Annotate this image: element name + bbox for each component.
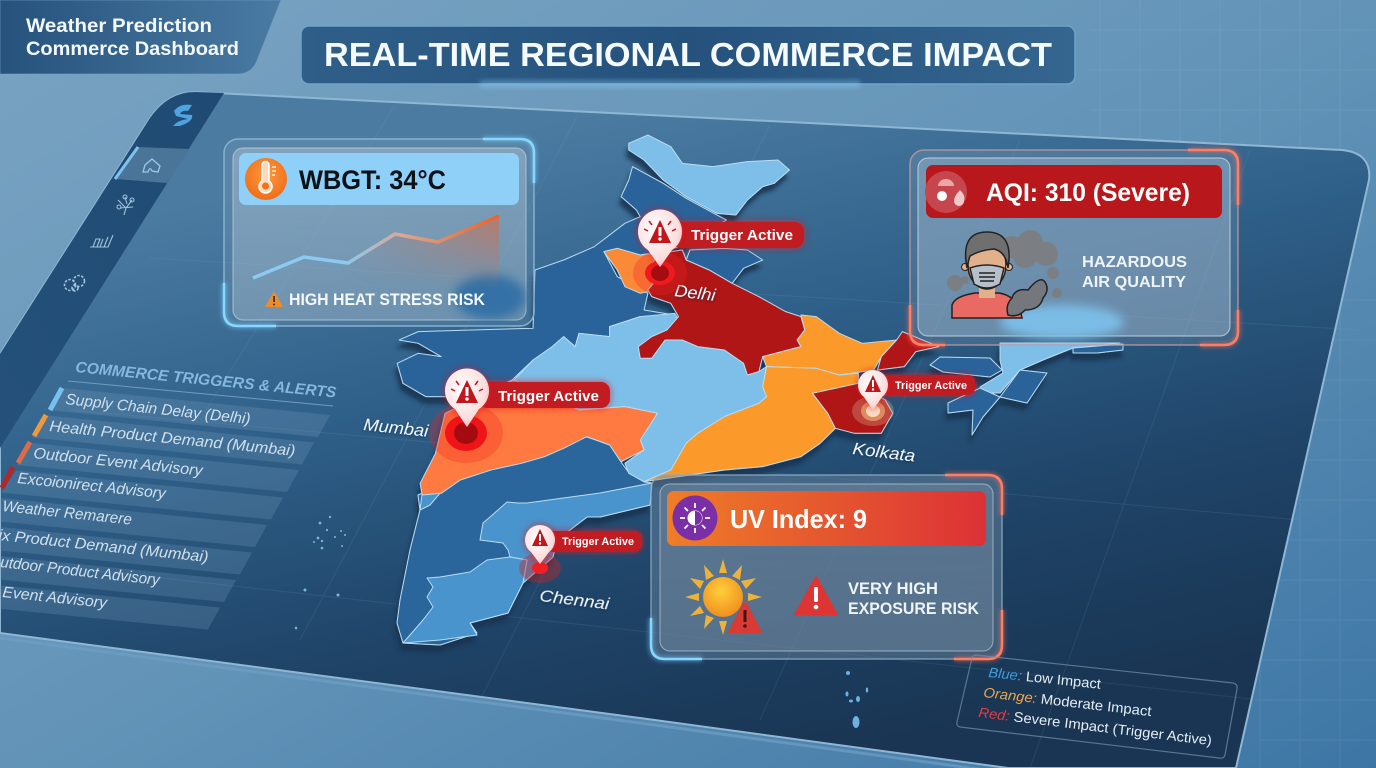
UV message: VERY HIGH xyxy=(848,579,938,598)
title xyxy=(301,26,1075,88)
state: Maharashtra xyxy=(420,380,657,495)
north-eastern states xyxy=(930,343,1123,435)
map city labels: Kolkata xyxy=(852,439,916,466)
Lakshadweep islands xyxy=(295,516,346,629)
map city labels xyxy=(363,281,916,614)
marker: Chennai trigger xyxy=(519,525,642,583)
title: REAL-TIME REGIONAL COMMERCE IMPACT xyxy=(324,36,1052,73)
sidebar icon: gear xyxy=(64,276,84,291)
map city labels: Chennai xyxy=(539,586,612,614)
marker: Mumbai trigger xyxy=(429,369,610,463)
legend: orange: Orange: Moderate Impact xyxy=(983,684,1153,719)
sidebar xyxy=(0,92,224,448)
commerce triggers and alerts list xyxy=(0,359,338,630)
WBGT trend chart xyxy=(253,216,499,292)
WBGT header xyxy=(239,153,519,205)
marker: Kolkata trigger xyxy=(852,370,975,426)
legend xyxy=(957,655,1237,758)
marker: Chennai trigger: Trigger Active xyxy=(562,536,634,548)
AQI message: AIR QUALITY xyxy=(1082,274,1186,291)
alert rows text: Outdoor Event Advisory xyxy=(33,445,205,480)
UV message xyxy=(848,579,980,618)
card: UV index xyxy=(651,475,1002,659)
peninsula base xyxy=(397,437,652,645)
state: Tamil Nadu xyxy=(403,557,527,643)
alert rows text: Health Product Demand (Mumbai) xyxy=(49,418,296,460)
AQI header xyxy=(926,165,1222,218)
UV header: UV Index: 9 xyxy=(730,504,867,534)
north-west states xyxy=(397,167,726,397)
state: Goa strip xyxy=(420,492,441,510)
WBGT header: WBGT: 34°C xyxy=(299,165,446,195)
sidebar logo xyxy=(173,105,192,126)
alert rows text: Excoionirect Advisory xyxy=(17,470,168,503)
header tab text: Weather Prediction xyxy=(26,16,212,37)
Kashmir and Ladakh xyxy=(629,135,789,215)
sidebar icon: network xyxy=(117,195,134,215)
state: Sikkim and north Bengal xyxy=(878,332,939,370)
state: Bihar xyxy=(763,315,897,375)
alert rows text: ix Product Demand (Mumbai) xyxy=(0,527,209,566)
icon: person with mask in smog xyxy=(947,230,1062,318)
sidebar home tab xyxy=(115,147,190,183)
state: Madhya Pradesh and central xyxy=(514,313,767,482)
UV message: EXPOSURE RISK xyxy=(848,599,980,618)
header tab text: Commerce Dashboard xyxy=(26,39,239,60)
marker: Delhi trigger: Trigger Active xyxy=(691,227,793,244)
card: AQI xyxy=(910,150,1238,345)
marker: Kolkata trigger: Trigger Active xyxy=(895,380,967,392)
state: Uttar Pradesh xyxy=(638,250,805,375)
icon: thermometer xyxy=(245,158,287,200)
map city labels: Mumbai xyxy=(363,415,431,441)
AQI message xyxy=(1082,254,1187,291)
map city labels: Delhi xyxy=(674,281,718,305)
UV header xyxy=(667,491,986,546)
WBGT warning: HIGH HEAT STRESS RISK xyxy=(289,290,486,309)
marker: Delhi trigger xyxy=(633,210,804,295)
map of India xyxy=(295,135,1123,728)
card: WBGT xyxy=(224,139,534,326)
AQI message: HAZARDOUS xyxy=(1082,254,1187,271)
alert colour markers xyxy=(2,388,62,488)
legend: red: Red: Severe Impact (Trigger Active) xyxy=(978,704,1213,748)
icon: sun with warning xyxy=(685,559,762,635)
marker: Mumbai trigger: Trigger Active xyxy=(498,388,599,405)
header tab xyxy=(0,0,281,74)
alert rows text: Supply Chain Delay (Delhi) xyxy=(65,391,251,428)
state: West Bengal xyxy=(812,383,893,433)
alert rows text: Event Advisory xyxy=(2,584,109,612)
alert rows text: Weather Remarere xyxy=(2,498,133,529)
state: Haryana xyxy=(604,248,659,293)
sidebar icon: chart xyxy=(90,235,113,247)
east of Delhi dark state xyxy=(686,248,763,283)
icon: gas mask xyxy=(925,171,967,213)
alert rows text: utdoor Product Advisory xyxy=(0,554,162,589)
Andaman islands xyxy=(846,671,868,728)
state: Jharkhand and Odisha xyxy=(644,367,858,482)
icon: UV badge xyxy=(672,496,718,540)
header tab text xyxy=(26,16,239,60)
state: Andhra coast xyxy=(480,483,652,583)
icon: warning triangle xyxy=(796,578,836,614)
AQI header: AQI: 310 (Severe) xyxy=(986,179,1190,207)
alerts heading: COMMERCE TRIGGERS & ALERTS xyxy=(75,359,338,402)
legend: blue: Blue: Low Impact xyxy=(988,664,1102,692)
alert rows text xyxy=(0,391,296,612)
